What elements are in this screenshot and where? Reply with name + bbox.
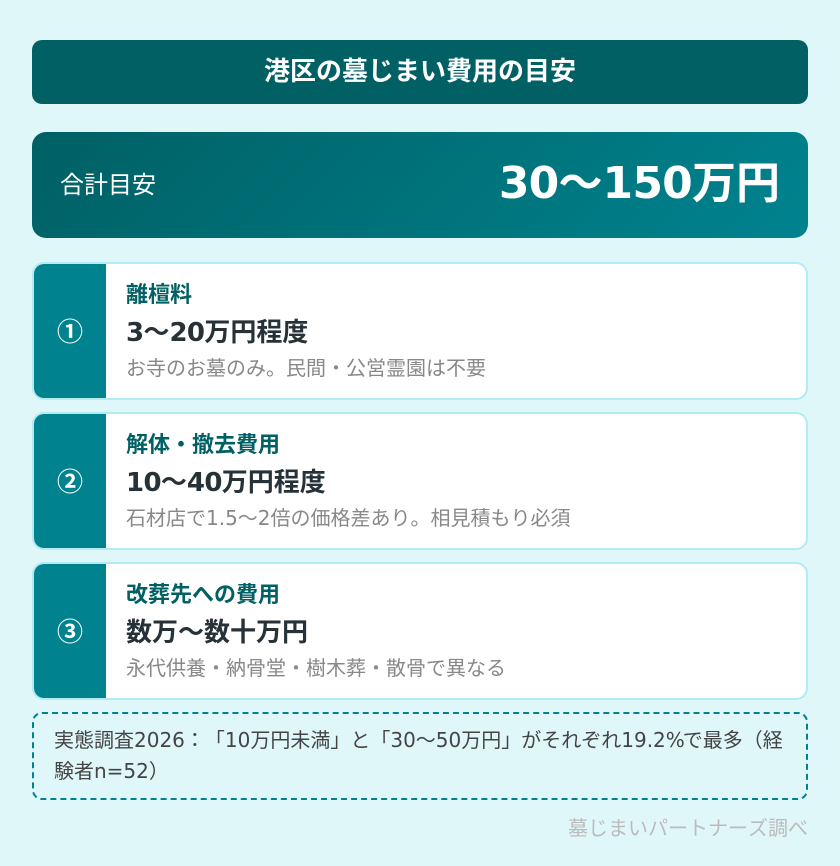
title: 港区の墓じまい費用の目安 [264, 57, 576, 87]
number badge 1 [34, 264, 106, 398]
number badge 2: ② [57, 462, 83, 499]
item 2 value: 10～40万円程度 [126, 468, 326, 498]
item 3 value: 数万～数十万円 [126, 618, 308, 648]
item 2 description: 石材店で1.5～2倍の価格差あり。相見積もり必須 [126, 506, 571, 530]
total amount: 30～150万円 [499, 158, 780, 209]
item 1 value: 3～20万円程度 [126, 318, 308, 348]
total label: 合計目安 [60, 171, 156, 199]
item 2 label: 解体・撤去費用 [126, 433, 280, 458]
number badge 3: ③ [57, 612, 83, 649]
panel: item 3 [32, 562, 808, 700]
panel: item 2 [32, 412, 808, 550]
title [32, 40, 808, 104]
number badge 1: ① [57, 312, 83, 349]
callout: survey note: 実態調査2026：「10万円未満」と「30～50万円」がそれぞれ19.2%で最多（経験者n=52） [54, 728, 783, 782]
panel: total estimate [32, 132, 808, 238]
number badge 2 [34, 414, 106, 548]
number badge 3 [34, 564, 106, 698]
callout: survey note [32, 712, 808, 800]
item 3 label: 改葬先への費用 [126, 583, 280, 608]
item 1 description: お寺のお墓のみ。民間・公営霊園は不要 [126, 356, 486, 380]
item 3 description: 永代供養・納骨堂・樹木葬・散骨で異なる [126, 656, 506, 680]
panel: item 1 [32, 262, 808, 400]
footer credit: 墓じまいパートナーズ調べ [568, 816, 808, 840]
item 1 label: 離檀料 [126, 283, 192, 308]
